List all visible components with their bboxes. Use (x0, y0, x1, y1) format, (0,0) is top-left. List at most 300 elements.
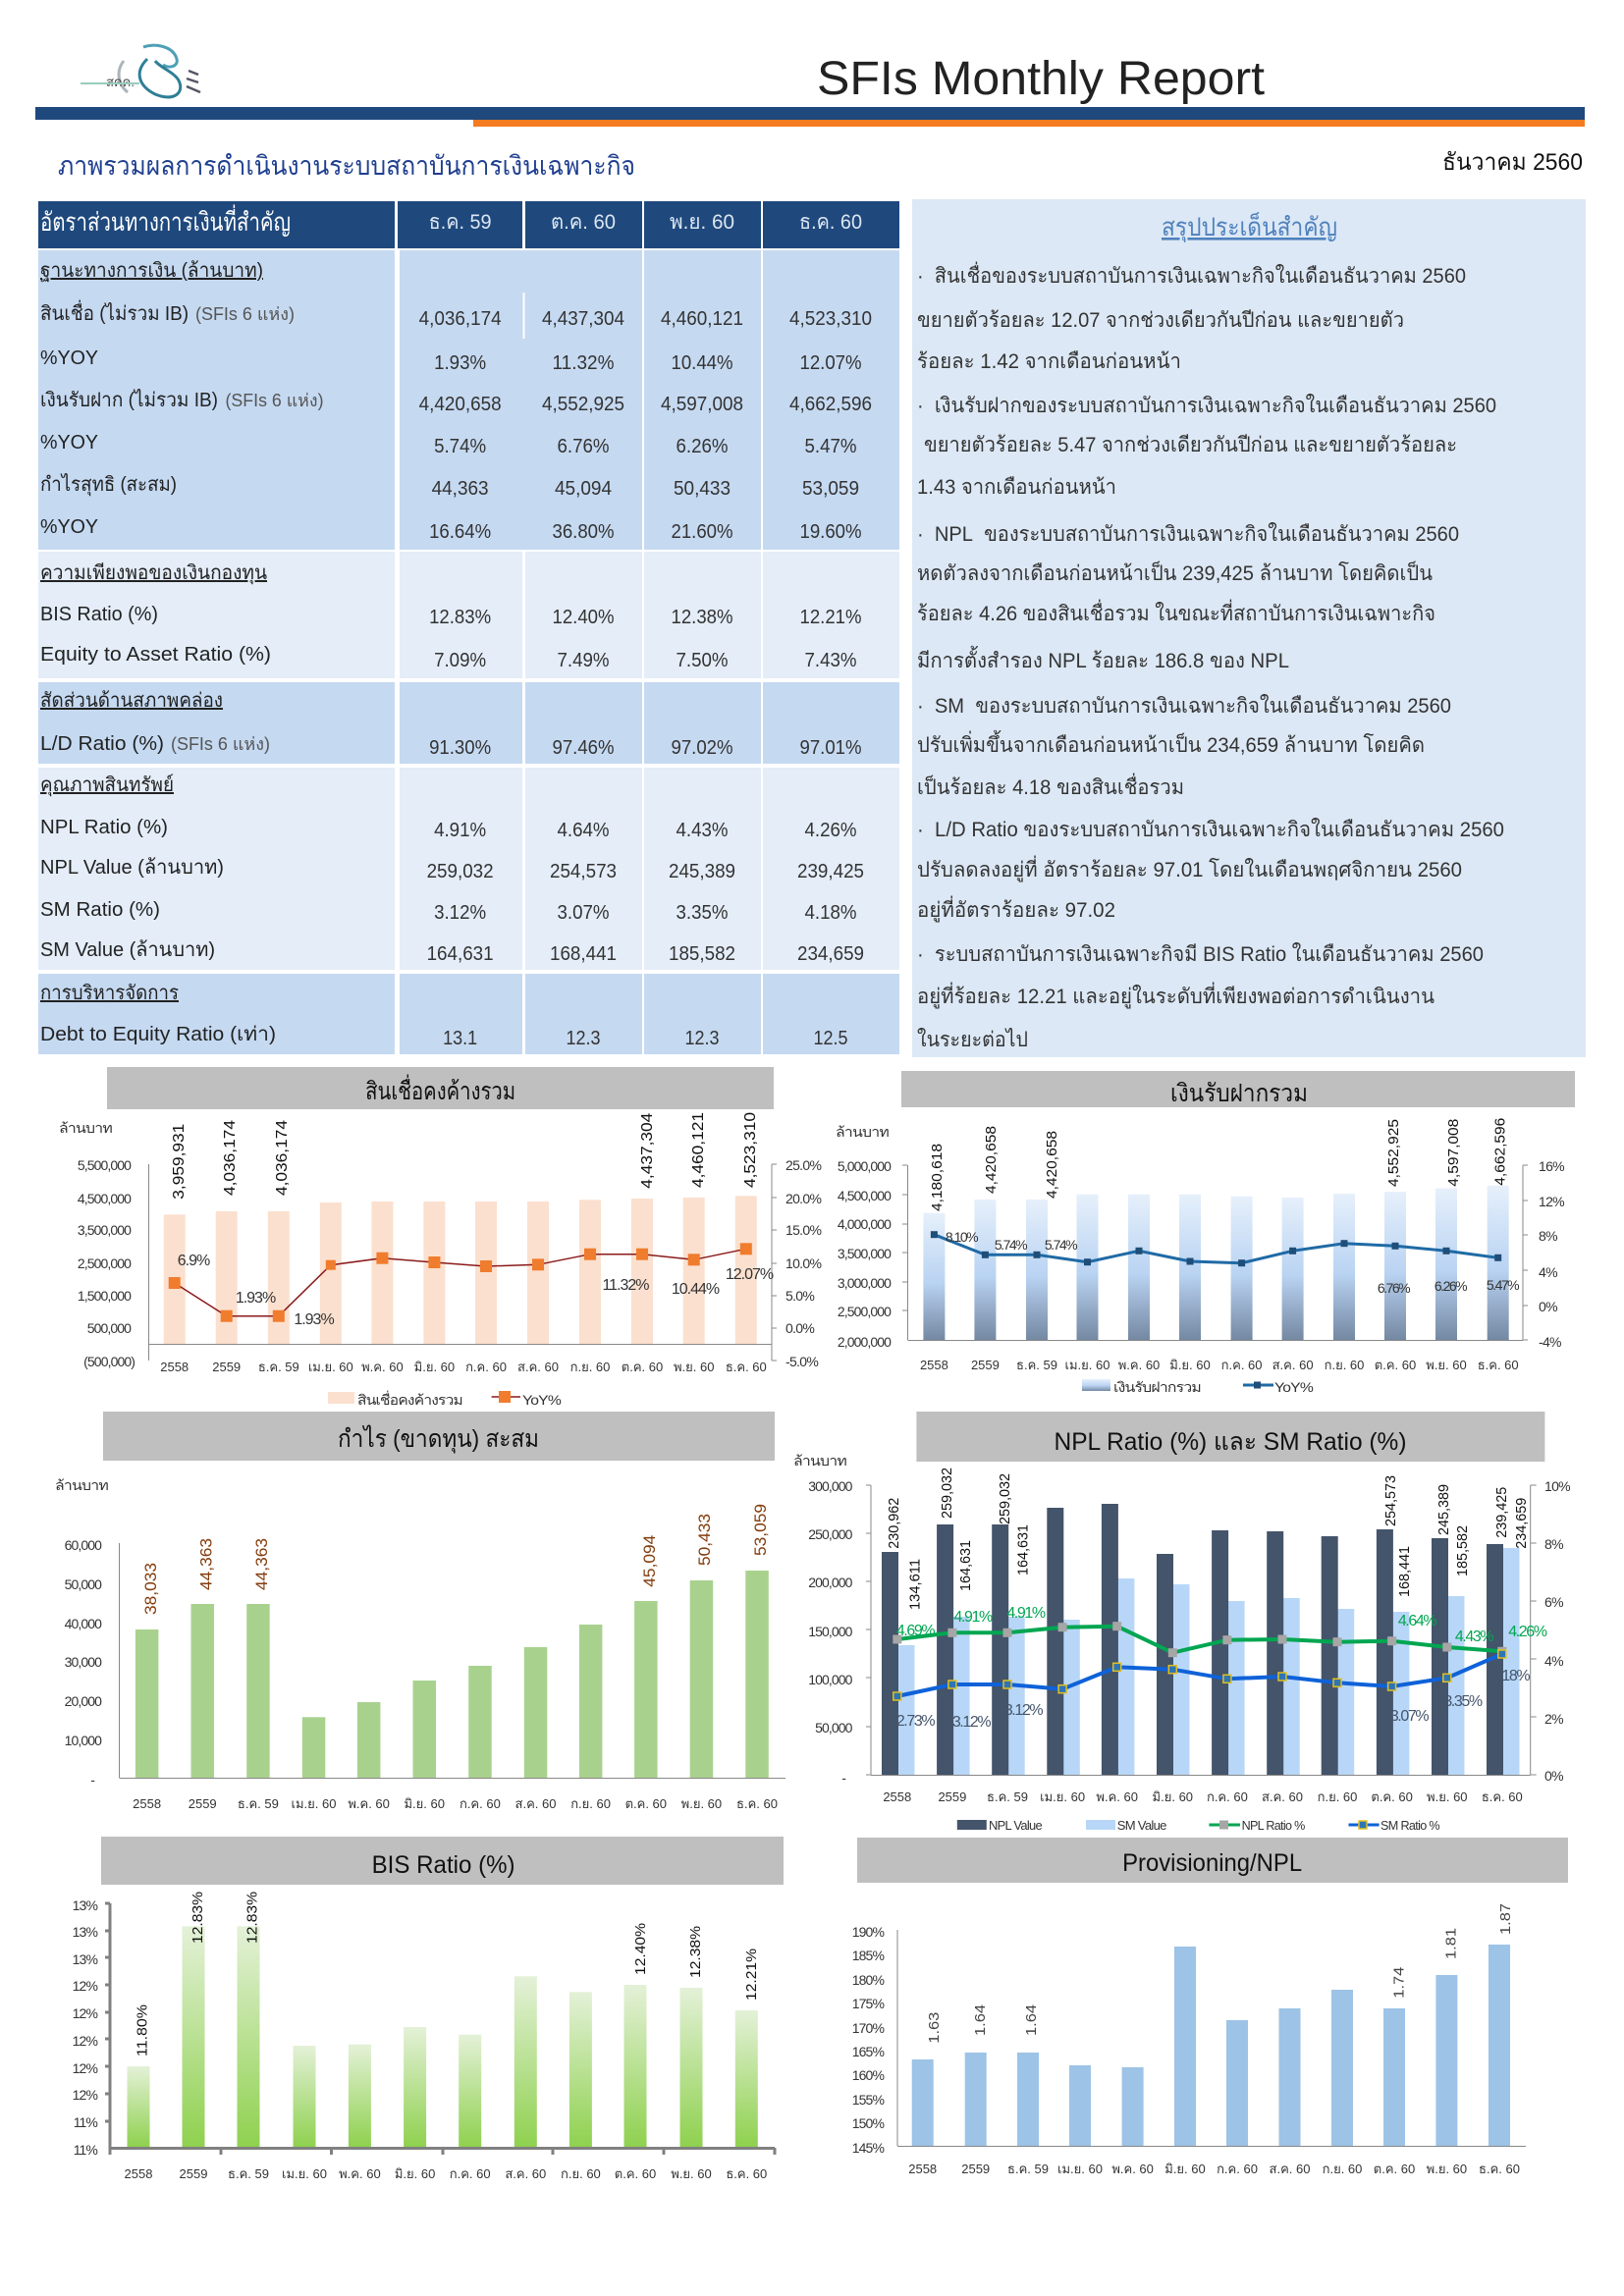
summary text: ปรับลดลงอยู่ที่ อัตราร้อยละ 97.01 โดยในเดือนพฤศจิกายน 2560 (917, 855, 1462, 882)
value labels: 259,032 (997, 1473, 1013, 1524)
left axis: 2,500,000 (838, 1304, 892, 1319)
section: asset quality: 3.07% (558, 902, 610, 924)
value labels: 164,631 (1015, 1524, 1032, 1575)
value labels: 4,420,658 (1044, 1131, 1060, 1199)
summary text: · NPL ของระบบสถาบันการเงินเฉพาะกิจในเดือนธันวาคม 2560 (917, 522, 1459, 546)
value labels: 245,389 (1435, 1484, 1452, 1535)
left axis: 5,000,000 (838, 1158, 892, 1174)
y axis: 60,000 (65, 1537, 102, 1553)
value labels: 4,180,618 (929, 1144, 946, 1211)
NPL ratio line (893, 1622, 1506, 1657)
month labels: มิ.ย. 60 (1153, 1789, 1193, 1804)
month labels: เม.ย. 60 (292, 1796, 336, 1811)
month labels: มิ.ย. 60 (414, 1360, 455, 1374)
y axis: 175% (852, 1996, 884, 2011)
section: management (38, 974, 899, 1054)
y axis: 155% (852, 2092, 884, 2108)
month labels: 2559 (180, 2166, 207, 2181)
month labels: ธ.ค. 60 (726, 2166, 767, 2181)
right axis: -4% (1539, 1334, 1561, 1350)
section: asset quality: NPL Ratio (%) (40, 817, 168, 838)
legend: YoY% (1274, 1379, 1313, 1395)
YoY labels: 6.9% (178, 1253, 210, 1269)
month labels: ต.ค. 60 (1371, 1789, 1413, 1804)
left axis: 3,500,000 (838, 1246, 892, 1261)
table header row: พ.ย. 60 (670, 211, 734, 234)
value labels (929, 1118, 1508, 1211)
section: financial position: 45,094 (555, 478, 612, 500)
value labels: 1.81 (1443, 1928, 1459, 1959)
right axis: 10% (1544, 1478, 1570, 1494)
section: financial position: 10.44% (672, 352, 733, 374)
month labels: ธ.ค. 60 (1482, 1789, 1523, 1804)
y axis: 170% (852, 2020, 884, 2036)
legend: SM Value (1117, 1818, 1166, 1833)
summary text: หดตัวลงจากเดือนก่อนหน้าเป็น 239,425 ล้านบาท โดยคิดเป็น (917, 560, 1433, 585)
y axis: 12% (73, 1978, 97, 1994)
section: financial position: 5.47% (805, 436, 857, 457)
value labels: 134,611 (907, 1559, 924, 1610)
value labels: 259,032 (939, 1468, 955, 1519)
month labels: ธ.ค. 59 (228, 2166, 269, 2181)
month labels (920, 1358, 1519, 1372)
month labels: 2558 (125, 2166, 152, 2181)
section: asset quality: 4.18% (805, 902, 857, 924)
YoY labels: 8.10% (946, 1229, 978, 1245)
right axis: 2% (1544, 1711, 1563, 1727)
value labels: 1.87 (1497, 1903, 1514, 1935)
section: financial position: 11.32% (552, 352, 615, 374)
summary text: · ระบบสถาบันการเงินเฉพาะกิจมี BIS Ratio ในเดือนธันวาคม 2560 (917, 942, 1484, 966)
y axis: 10,000 (65, 1733, 102, 1748)
value labels: 234,659 (1513, 1498, 1530, 1549)
value labels: 4,523,310 (742, 1112, 759, 1188)
value labels: 45,094 (640, 1535, 659, 1587)
chart title: Provisioning/NPL (1122, 1849, 1302, 1877)
y axis (65, 1537, 120, 1788)
left axis (808, 1478, 871, 1786)
month labels: ส.ค. 60 (517, 1360, 559, 1374)
summary text: ขยายตัวร้อยละ 12.07 จากช่วงเดียวกันปีก่อน และขยายตัว (917, 309, 1404, 332)
month labels: ธ.ค. 59 (238, 1796, 279, 1811)
month labels: ธ.ค. 59 (1007, 2162, 1049, 2176)
section: financial position: 6.76% (558, 436, 610, 457)
section: liquidity: 97.02% (672, 737, 733, 759)
section: liquidity: 91.30% (429, 737, 491, 759)
section: financial position: %YOY (40, 432, 98, 454)
panel: financial ratio table (38, 201, 899, 1054)
month labels: 2559 (961, 2162, 990, 2176)
section: asset quality: 3.35% (676, 902, 729, 924)
y axis (852, 1924, 897, 2156)
value labels: 12.83% (189, 1892, 206, 1944)
month labels: ก.ย. 60 (561, 2166, 601, 2181)
legend: SM Ratio % (1380, 1818, 1440, 1833)
YoY labels (178, 1253, 774, 1328)
chart title: NPL Ratio (%) และ SM Ratio (%) (1055, 1428, 1406, 1456)
NPL ratio labels (896, 1605, 1547, 1645)
y axis: 11% (74, 2114, 97, 2130)
value labels: 164,631 (957, 1540, 974, 1591)
page subtitle: ภาพรวมผลการดำเนินงานระบบสถาบันการเงินเฉพาะกิจ (58, 151, 635, 181)
month labels: ก.ค. 60 (1221, 1358, 1263, 1372)
summary text: ปรับเพิ่มขึ้นจากเดือนก่อนหน้าเป็น 234,659 ล้านบาท โดยคิด (917, 730, 1425, 757)
section: liquidity: L/D Ratio (%) (40, 733, 164, 755)
section: capital adequacy: Equity to Asset Ratio (%) (40, 644, 271, 666)
month labels: ก.ย. 60 (1325, 1358, 1364, 1372)
YoY labels: 1.93% (236, 1290, 276, 1307)
section: capital adequacy (38, 552, 899, 678)
summary text: เป็นร้อยละ 4.18 ของสินเชื่อรวม (917, 773, 1184, 799)
legend: NPL Ratio % (1242, 1818, 1306, 1833)
section: asset quality (38, 768, 899, 970)
right axis (1523, 1158, 1564, 1350)
month labels: ธ.ค. 59 (1016, 1358, 1057, 1372)
SM value bars (897, 1548, 1520, 1775)
y axis: 40,000 (65, 1616, 102, 1631)
value labels (134, 1892, 760, 2056)
table header row: อัตราส่วนทางการเงินที่สำคัญ (40, 204, 291, 237)
left axis: 5,500,000 (78, 1157, 132, 1173)
month labels: พ.ค. 60 (348, 1796, 390, 1811)
y axis: 13% (73, 1897, 97, 1913)
section: asset quality: 4.26% (805, 820, 857, 841)
SM ratio labels: 3.12% (952, 1714, 991, 1731)
section: asset quality: 4.91% (434, 820, 486, 841)
left axis (838, 1158, 907, 1350)
y axis: 190% (852, 1924, 884, 1940)
value labels: 44,363 (196, 1538, 216, 1590)
month labels: พ.ค. 60 (1096, 1789, 1138, 1804)
section: capital adequacy: 12.38% (672, 607, 733, 628)
chart title (901, 1071, 1575, 1107)
NPL ratio labels: 4.64% (1398, 1613, 1436, 1629)
YoY labels: 6.26% (1435, 1278, 1467, 1294)
left axis (78, 1157, 149, 1369)
left axis: 3,000,000 (838, 1275, 892, 1291)
value labels: 230,962 (886, 1498, 902, 1549)
month labels: ส.ค. 60 (505, 2166, 546, 2181)
y axis (73, 1897, 110, 2158)
right axis: 8% (1539, 1228, 1557, 1244)
y axis: - (90, 1772, 95, 1788)
month labels: 2558 (133, 1796, 161, 1811)
month labels (908, 2162, 1520, 2176)
month labels: พ.ย. 60 (681, 1796, 722, 1811)
month labels: พ.ย. 60 (1426, 1358, 1467, 1372)
right axis: 4% (1544, 1653, 1563, 1669)
value labels: 53,059 (751, 1504, 770, 1556)
y axis: 185% (852, 1948, 884, 1963)
month labels: ก.ย. 60 (1318, 1789, 1357, 1804)
value labels: 239,425 (1493, 1487, 1510, 1538)
section: capital adequacy: 7.50% (676, 650, 729, 671)
month labels: มิ.ย. 60 (395, 2166, 435, 2181)
month labels: ธ.ค. 60 (736, 1796, 778, 1811)
section: financial position: 16.64% (429, 521, 491, 543)
value labels: 4,552,925 (1385, 1119, 1402, 1187)
chart panel: total outstanding loans (59, 1067, 821, 1408)
value labels: 1.63 (926, 2012, 943, 2044)
YoY line (931, 1231, 1501, 1266)
right axis: 0% (1544, 1768, 1563, 1784)
section: capital adequacy: 12.40% (552, 607, 615, 628)
month labels: ก.ค. 60 (1217, 2162, 1258, 2176)
section: financial position: 4,662,596 (789, 394, 872, 415)
y axis: 12% (73, 2060, 97, 2076)
section: financial position: 19.60% (799, 521, 862, 543)
table header row: ธ.ค. 60 (799, 211, 862, 234)
section: financial position: 4,552,925 (542, 394, 624, 415)
chart panel: BIS ratio (73, 1837, 784, 2181)
month labels: ธ.ค. 60 (1478, 1358, 1519, 1372)
value labels: 12.38% (687, 1926, 704, 1978)
chart title (103, 1412, 775, 1461)
y axis: 12% (73, 2087, 97, 2103)
month labels: เม.ย. 60 (1040, 1789, 1085, 1804)
section: liquidity: 97.46% (552, 737, 615, 759)
month labels: ก.ย. 60 (570, 1796, 611, 1811)
month labels (125, 2166, 767, 2181)
section: financial position: 4,437,304 (542, 308, 624, 330)
chart title (857, 1838, 1568, 1883)
summary text: · สินเชื่อของระบบสถาบันการเงินเฉพาะกิจในเดือนธันวาคม 2560 (917, 261, 1466, 288)
section: asset quality: 4.64% (558, 820, 610, 841)
month labels: พ.ย. 60 (671, 2166, 712, 2181)
section: asset quality: NPL Value (ล้านบาท) (40, 857, 224, 879)
value labels: 38,033 (141, 1563, 160, 1615)
section: capital adequacy: 7.49% (558, 650, 610, 671)
header: report title: SFIs Monthly Report (817, 53, 1265, 105)
NPL ratio labels: 4.91% (953, 1609, 993, 1626)
chart title: สินเชื่อคงค้างรวม (365, 1074, 515, 1105)
month labels: มิ.ย. 60 (1169, 1358, 1211, 1372)
section: liquidity: สัดส่วนด้านสภาพคล่อง (40, 690, 223, 712)
header: logo (81, 45, 200, 97)
month labels: ส.ค. 60 (1270, 2162, 1310, 2176)
NPL value bars (882, 1504, 1503, 1775)
month labels: ก.ค. 60 (460, 1796, 501, 1811)
left axis: 2,500,000 (78, 1255, 132, 1271)
month labels: ส.ค. 60 (1272, 1358, 1314, 1372)
summary text: · SM ของระบบสถาบันการเงินเฉพาะกิจในเดือนธันวาคม 2560 (917, 694, 1451, 718)
month labels: 2558 (160, 1360, 189, 1374)
right axis: 8% (1544, 1536, 1563, 1552)
section: liquidity: (SFIs 6 แห่ง) (171, 734, 270, 754)
right axis: -5.0% (785, 1354, 818, 1369)
value labels: 4,036,174 (274, 1120, 291, 1196)
y axis: 11% (74, 2142, 97, 2158)
section: asset quality: SM Value (ล้านบาท) (40, 939, 215, 961)
month labels: พ.ย. 60 (1427, 2162, 1467, 2176)
value labels: 50,433 (695, 1514, 714, 1566)
section: financial position: กำไรสุทธิ (สะสม) (40, 473, 177, 497)
month labels: มิ.ย. 60 (404, 1796, 445, 1811)
panel: key points summary (912, 199, 1586, 1057)
chart title (101, 1837, 784, 1885)
month labels: 2559 (938, 1789, 966, 1804)
month labels: พ.ค. 60 (361, 1360, 404, 1374)
chart title: BIS Ratio (%) (372, 1851, 515, 1879)
left axis: - (841, 1770, 846, 1786)
summary text (917, 261, 1504, 1051)
month labels: มิ.ย. 60 (1164, 2162, 1206, 2176)
section: management: 12.3 (566, 1028, 601, 1049)
section: asset quality: คุณภาพสินทรัพย์ (40, 774, 174, 797)
section: asset quality: 245,389 (669, 861, 735, 882)
value labels (171, 1112, 759, 1200)
month labels: 2559 (971, 1358, 1000, 1372)
value labels: 4,420,658 (983, 1126, 1000, 1194)
value labels: 168,441 (1396, 1546, 1413, 1597)
legend: NPL Value (989, 1818, 1042, 1833)
value labels (886, 1468, 1530, 1610)
legend (328, 1391, 561, 1408)
left axis: 50,000 (815, 1720, 853, 1735)
NPL ratio labels: 4.26% (1508, 1624, 1547, 1640)
YoY labels: 10.44% (672, 1281, 720, 1298)
y axis: 150% (852, 2115, 884, 2131)
unit label: ล้านบาท (793, 1453, 847, 1468)
month labels: ธ.ค. 60 (726, 1360, 767, 1374)
month labels: ต.ค. 60 (1374, 2162, 1415, 2176)
legend: สินเชื่อคงค้างรวม (357, 1391, 462, 1408)
unit label: ล้านบาท (55, 1477, 109, 1493)
section: asset quality: 259,032 (427, 861, 494, 882)
section: asset quality: 3.12% (434, 902, 486, 924)
left axis: 4,000,000 (838, 1216, 892, 1232)
section: financial position: 4,597,008 (661, 394, 743, 415)
section: financial position: 44,363 (432, 478, 489, 500)
section: management: 13.1 (443, 1028, 477, 1049)
YoY labels: 6.76% (1378, 1280, 1410, 1296)
right axis (1531, 1478, 1570, 1784)
value labels: 12.83% (244, 1892, 261, 1944)
section: capital adequacy: 7.09% (434, 650, 486, 671)
summary text: ขยายตัวร้อยละ 5.47 จากช่วงเดียวกันปีก่อน และขยายตัวร้อยละ (924, 434, 1457, 456)
y axis: 165% (852, 2044, 884, 2059)
SM ratio labels: 2.73% (896, 1713, 935, 1730)
right axis: 15.0% (785, 1222, 821, 1238)
section: financial position: 50,433 (674, 478, 731, 500)
section: management: Debt to Equity Ratio (เท่า) (40, 1024, 276, 1045)
summary text: อยู่ที่อัตราร้อยละ 97.02 (917, 895, 1115, 923)
NPL ratio labels: 4.43% (1455, 1629, 1493, 1645)
section: capital adequacy: 12.83% (429, 607, 491, 628)
left axis: 300,000 (808, 1478, 853, 1494)
section: financial position: เงินรับฝาก (ไม่รวม IB) (40, 389, 218, 411)
month labels: ก.ย. 60 (1323, 2162, 1362, 2176)
section: liquidity: 97.01% (799, 737, 862, 759)
section: financial position: %YOY (40, 347, 98, 369)
left axis: 2,000,000 (838, 1334, 892, 1350)
right axis: 0% (1539, 1299, 1557, 1314)
value labels: 1.64 (1023, 2004, 1040, 2036)
section: financial position: 4,036,174 (419, 308, 502, 330)
YoY labels (946, 1229, 1519, 1296)
chart panel: provisioning to NPL (852, 1838, 1568, 2176)
section: financial position: 4,420,658 (419, 394, 502, 415)
YoY labels: 5.74% (995, 1237, 1027, 1253)
section: asset quality: 4.43% (676, 820, 729, 841)
SM ratio labels: 3.07% (1390, 1708, 1429, 1725)
YoY labels: 5.74% (1045, 1237, 1077, 1253)
report month: ธันวาคม 2560 (1442, 149, 1583, 176)
month labels: ธ.ค. 60 (1479, 2162, 1520, 2176)
left axis: 1,500,000 (78, 1288, 132, 1304)
header bar (35, 107, 1585, 127)
month labels: พ.ย. 60 (674, 1360, 714, 1374)
section: asset quality: 254,573 (550, 861, 617, 882)
month labels: 2559 (189, 1796, 217, 1811)
y axis: 160% (852, 2067, 884, 2083)
section: financial position: 36.80% (552, 521, 615, 543)
value labels: 4,036,174 (222, 1120, 239, 1196)
deposit bars (923, 1186, 1509, 1340)
left axis: 150,000 (808, 1624, 853, 1639)
YoY labels: 5.47% (1487, 1277, 1519, 1293)
month labels (883, 1789, 1523, 1804)
section: liquidity (38, 682, 899, 764)
unit label: ล้านบาท (59, 1120, 113, 1136)
section: financial position: 21.60% (672, 521, 733, 543)
month labels: ต.ค. 60 (615, 2166, 656, 2181)
section: financial position: 12.07% (799, 352, 862, 374)
section: asset quality: 234,659 (797, 943, 864, 965)
right axis: 0.0% (785, 1320, 814, 1336)
right axis: 25.0% (785, 1157, 821, 1173)
YoY line (169, 1243, 752, 1322)
section: financial position: 1.93% (434, 352, 486, 374)
value labels (141, 1504, 770, 1615)
chart title: เงินรับฝากรวม (1170, 1080, 1308, 1107)
value labels: 44,363 (252, 1538, 271, 1590)
table header row (38, 201, 899, 248)
right axis: 4% (1539, 1264, 1557, 1280)
month labels: พ.ค. 60 (339, 2166, 381, 2181)
y axis: 180% (852, 1972, 884, 1988)
section: capital adequacy: 12.21% (799, 607, 862, 628)
YoY labels: 1.93% (294, 1311, 334, 1328)
section: capital adequacy: BIS Ratio (%) (40, 604, 158, 625)
month labels: เม.ย. 60 (1057, 2162, 1103, 2176)
section: asset quality: 168,441 (550, 943, 617, 965)
value labels: 185,582 (1454, 1525, 1471, 1576)
y axis: 50,000 (65, 1576, 102, 1592)
table header row: ธ.ค. 59 (429, 211, 492, 234)
y axis: 12% (73, 2005, 97, 2021)
NPL ratio labels: 4.91% (1006, 1605, 1046, 1622)
section: financial position: 4,523,310 (789, 308, 872, 330)
section: asset quality: 239,425 (797, 861, 864, 882)
month labels: 2558 (908, 2162, 937, 2176)
section: financial position: %YOY (40, 516, 98, 538)
right axis: 5.0% (785, 1288, 814, 1304)
left axis: 200,000 (808, 1575, 853, 1590)
right axis: 16% (1539, 1158, 1564, 1174)
section: financial position: สินเชื่อ (ไม่รวม IB) (40, 299, 189, 325)
right axis (772, 1157, 821, 1369)
y axis: 12% (73, 2033, 97, 2049)
y axis: 30,000 (65, 1654, 102, 1670)
month labels: เม.ย. 60 (308, 1360, 353, 1374)
left axis: 3,500,000 (78, 1222, 132, 1238)
chart panel: cumulative profit (55, 1412, 785, 1811)
section: management: การบริหารจัดการ (40, 983, 179, 1004)
summary text: 1.43 จากเดือนก่อนหน้า (917, 476, 1116, 499)
month labels (133, 1796, 778, 1811)
chart title (916, 1412, 1544, 1462)
